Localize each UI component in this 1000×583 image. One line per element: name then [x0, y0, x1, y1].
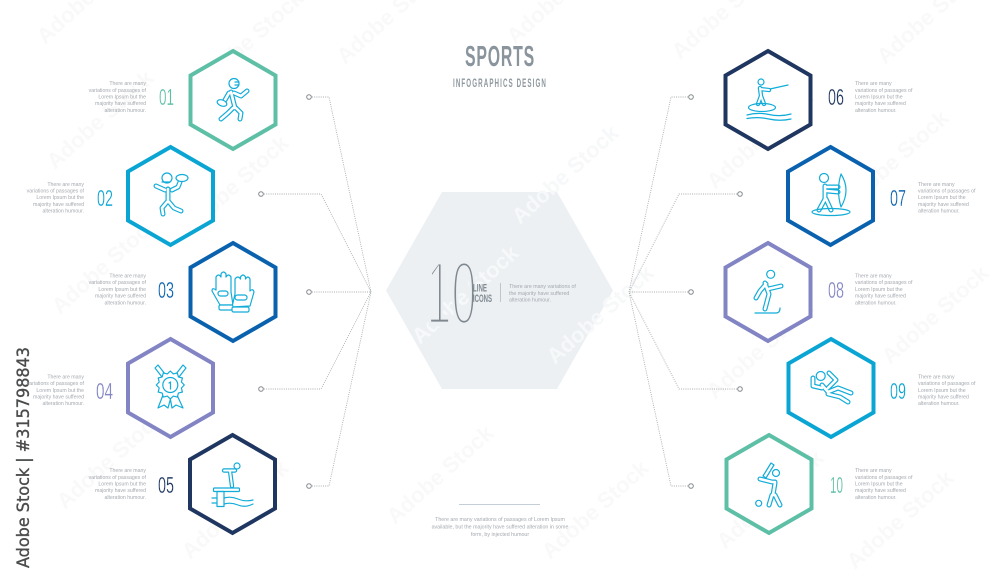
line icons label: LINE: [473, 282, 487, 294]
description 03: variations of passages of: [89, 280, 147, 286]
text: Adobe Stock: [47, 210, 164, 319]
center hexagon panel: Adobe Stock: [542, 260, 659, 369]
number 08: 08: [828, 277, 844, 303]
icon: diver: [212, 463, 253, 506]
description 05: alteration humour.: [104, 495, 146, 501]
description 07: variations of passages of: [918, 188, 976, 194]
center description: [509, 284, 576, 304]
description 09: Lorem Ipsum but the: [918, 388, 966, 394]
description 09: majority have suffered: [918, 394, 969, 400]
description 07: majority have suffered: [918, 202, 969, 208]
description 08: alteration humour.: [855, 300, 897, 306]
description 05: [89, 468, 147, 501]
center description: alteration humour.: [509, 298, 551, 304]
description 07: alteration humour.: [918, 208, 960, 214]
line icons label: [473, 282, 492, 305]
description 05: variations of passages of: [89, 475, 147, 481]
description 02: variations of passages of: [27, 188, 85, 194]
center hexagon panel: [386, 120, 659, 389]
right connector lines: [629, 95, 742, 488]
description 01: alteration humour.: [104, 108, 146, 114]
text: Adobe Stock: [52, 405, 169, 514]
description 04: [27, 374, 85, 407]
text: Adobe Stock: [42, 65, 159, 174]
description 05: Lorem Ipsum but the: [98, 482, 146, 488]
description 02: majority have suffered: [33, 202, 84, 208]
description 01: majority have suffered: [95, 101, 146, 107]
footer text: [432, 517, 568, 538]
description 09: [918, 374, 976, 407]
description 06: There are many: [855, 81, 892, 87]
footer text: form, by injected humour: [471, 532, 529, 538]
icon: gloves: [212, 272, 254, 312]
description 01: variations of passages of: [89, 88, 147, 94]
center description: the majority have suffered: [509, 291, 569, 297]
description 06: [855, 81, 913, 114]
description 03: Lorem Ipsum but the: [98, 287, 146, 293]
description 07: Lorem Ipsum but the: [918, 195, 966, 201]
footer text: There are many variations of passages of Lorem Ipsum: [435, 517, 566, 523]
description 10: majority have suffered: [855, 488, 906, 494]
line icons label: ICONS: [473, 293, 492, 305]
number 03: 03: [158, 277, 174, 303]
description 06: Lorem Ipsum but the: [855, 94, 903, 100]
number 06: 06: [828, 84, 844, 110]
number 10: 10: [830, 472, 843, 498]
description 09: There are many: [918, 374, 955, 380]
description 04: alteration humour.: [42, 401, 84, 407]
left connector lines: [259, 95, 371, 488]
text: Adobe Stock: [177, 455, 294, 564]
description 08: [855, 274, 913, 306]
text: Adobe Stock: [177, 130, 294, 239]
icon: wakeboarder: [747, 79, 791, 120]
description 05: There are many: [109, 468, 146, 474]
description 09: variations of passages of: [918, 381, 976, 387]
description 06: alteration humour.: [855, 108, 897, 114]
center hexagon panel: Adobe Stock: [407, 240, 524, 349]
watermark id: Adobe Stock | #315798843: [14, 347, 33, 568]
item 07: [788, 147, 976, 245]
description 03: alteration humour.: [104, 300, 146, 306]
big number ten: 10: [426, 244, 477, 344]
subtitle: INFOGRAPHICS DESIGN: [453, 78, 547, 90]
icon: skier: [755, 270, 781, 313]
description 10: variations of passages of: [855, 475, 913, 481]
description 02: There are many: [47, 182, 84, 188]
description 04: majority have suffered: [33, 394, 84, 400]
icon: football thrower: [156, 173, 188, 214]
description 01: There are many: [109, 81, 146, 87]
icon: medal: [155, 365, 186, 408]
description 07: [918, 182, 976, 214]
description 05: majority have suffered: [95, 488, 146, 494]
description 08: There are many: [855, 274, 892, 280]
description 04: There are many: [47, 374, 84, 380]
description 10: Lorem Ipsum but the: [855, 482, 903, 488]
item 01: [89, 51, 276, 149]
item 06: [726, 51, 913, 149]
number 01: 01: [159, 84, 174, 110]
number 05: 05: [158, 472, 174, 498]
description 06: variations of passages of: [855, 88, 913, 94]
description 01: Lorem Ipsum but the: [98, 94, 146, 100]
icon: golfer: [756, 463, 780, 506]
item 09: [788, 339, 976, 437]
description 04: Lorem Ipsum but the: [36, 388, 84, 394]
number 02: 02: [97, 185, 113, 211]
description 04: variations of passages of: [27, 381, 85, 387]
description 06: majority have suffered: [855, 101, 906, 107]
description 03: There are many: [109, 274, 146, 280]
footer text: available, but the majority have suffered alteration in some: [432, 524, 568, 530]
description 03: [89, 274, 147, 306]
text: Adobe Stock: [537, 455, 654, 564]
text: Adobe Stock: [702, 85, 819, 194]
item 08: [726, 243, 913, 341]
item 02: [27, 147, 213, 245]
center description: There are many variations of: [509, 284, 576, 290]
text: Adobe Stock: [382, 420, 499, 529]
icon: surfer with board: [812, 174, 850, 216]
number 07: 07: [890, 185, 906, 211]
item 03: [89, 243, 276, 341]
item 04: [27, 339, 213, 437]
description 10: [855, 468, 913, 501]
description 10: alteration humour.: [855, 495, 897, 501]
description 03: majority have suffered: [95, 294, 146, 300]
description 10: There are many: [855, 468, 892, 474]
item 10: [726, 435, 913, 533]
description 08: majority have suffered: [855, 294, 906, 300]
description 02: [27, 182, 85, 214]
text: Adobe Stock: [712, 445, 829, 554]
text: Adobe Stock: [877, 260, 994, 369]
title: SPORTS: [465, 41, 535, 73]
icon: football runner: [216, 78, 247, 119]
icon: reclining swimmer: [813, 372, 851, 402]
text: Adobe Stock: [842, 465, 959, 574]
description 09: alteration humour.: [918, 401, 960, 407]
text: Adobe Stock: [837, 105, 954, 214]
item 05: [89, 435, 275, 533]
description 08: variations of passages of: [855, 280, 913, 286]
center hexagon panel: Adobe Stock: [507, 120, 624, 229]
number 09: 09: [890, 378, 906, 404]
number 04: 04: [96, 378, 113, 404]
text: Adobe Stock: [702, 295, 819, 404]
description 01: [89, 81, 147, 114]
description 02: Lorem Ipsum but the: [36, 195, 84, 201]
description 02: alteration humour.: [42, 208, 84, 214]
description 08: Lorem Ipsum but the: [855, 287, 903, 293]
description 07: There are many: [918, 182, 955, 188]
